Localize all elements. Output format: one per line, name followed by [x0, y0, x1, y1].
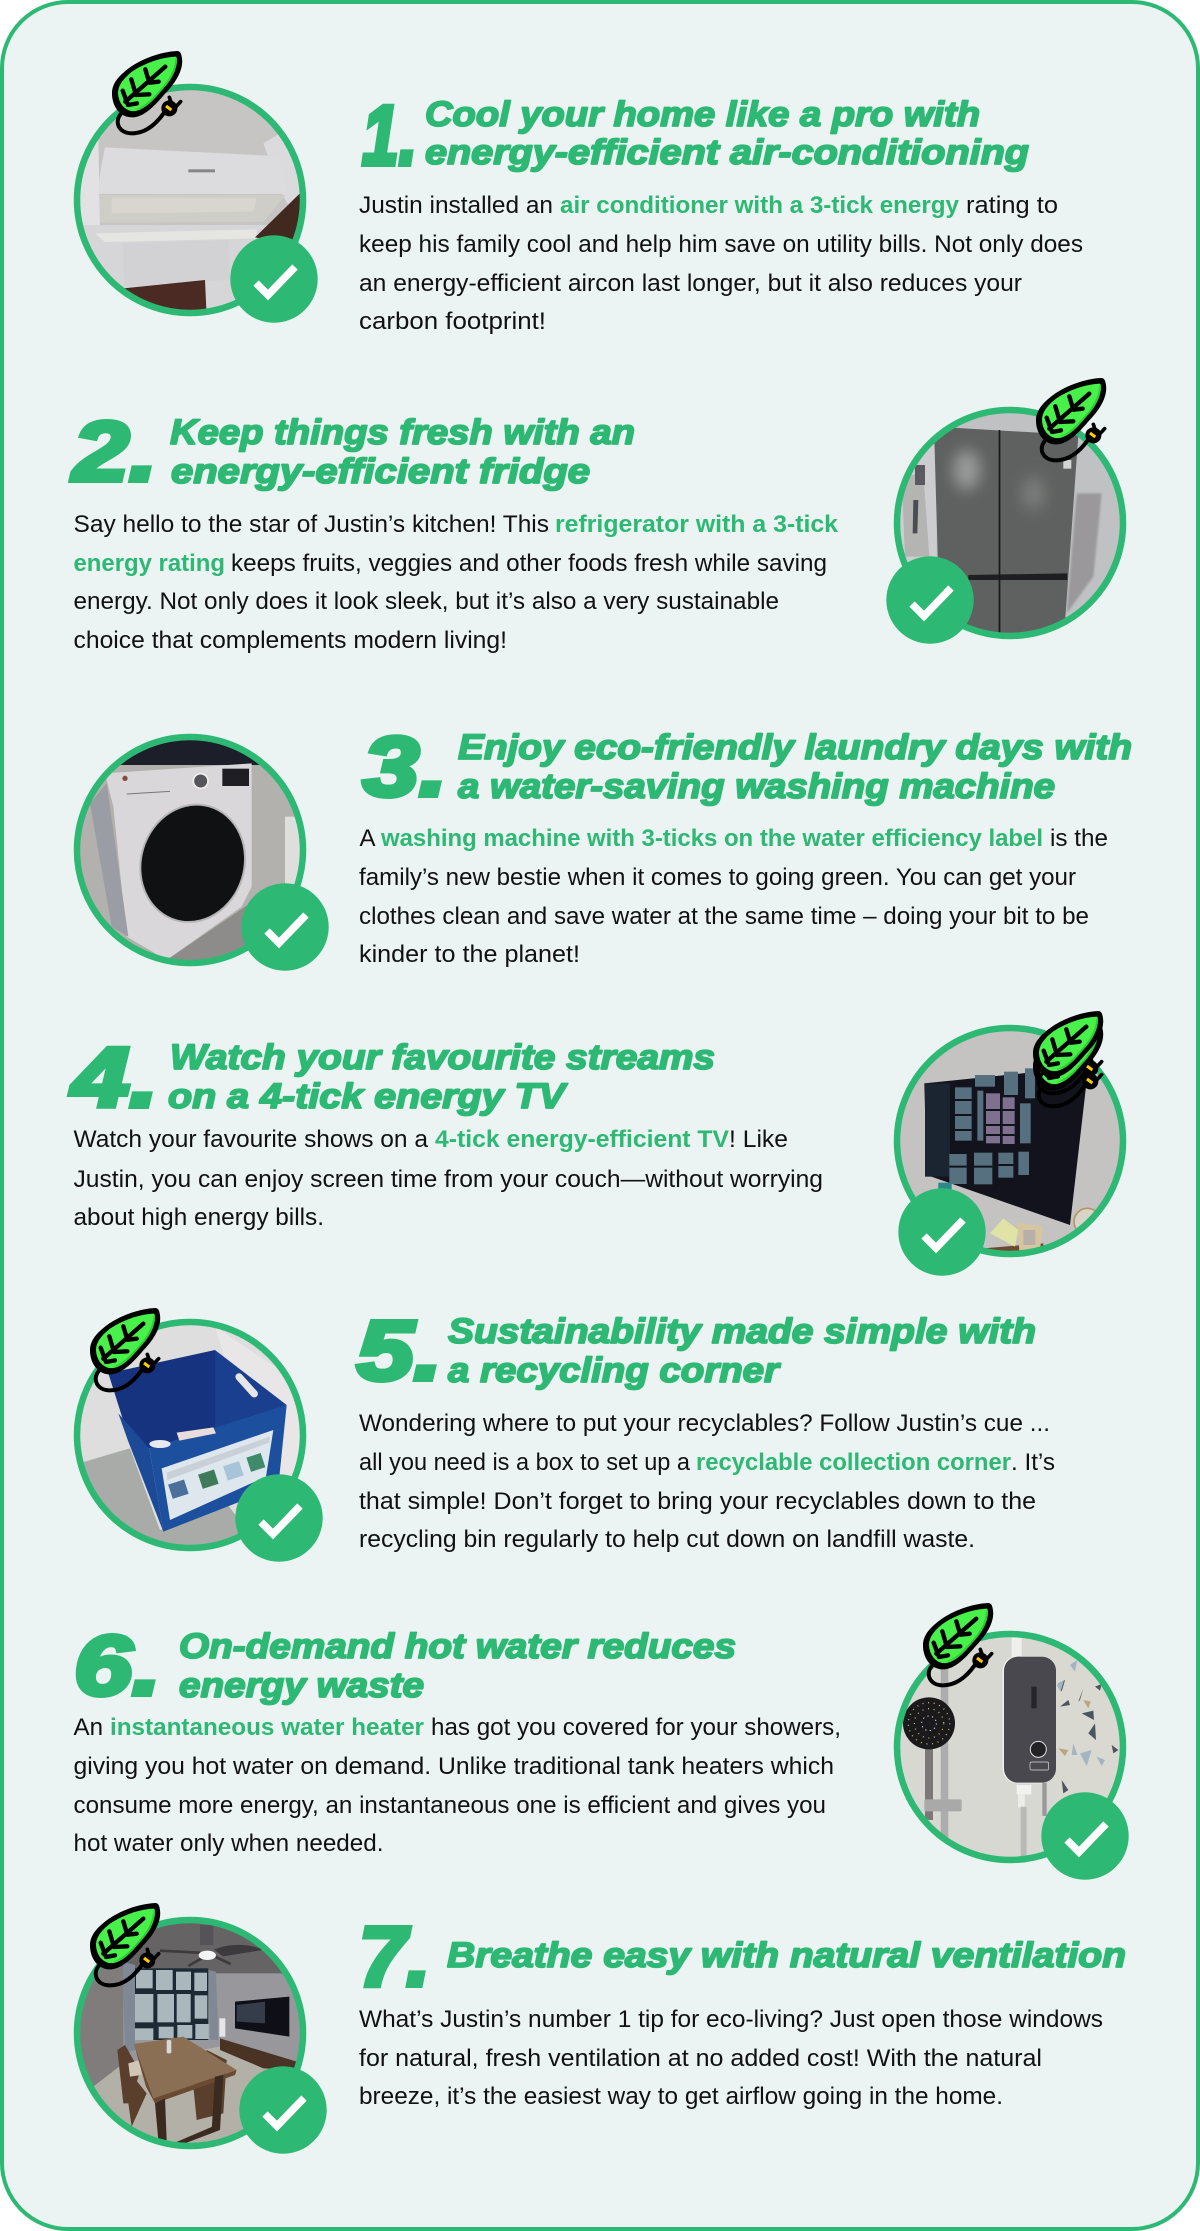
body text: energy. Not only does it look sleek, but it’s also a very sustainable [74, 588, 779, 615]
heading: ventilation: Breathe easy with natural ventilation [447, 1936, 1126, 1975]
body text: an energy-efficient aircon last longer, but it also reduces your [359, 270, 1022, 297]
section 4: TV [70, 1011, 1130, 1276]
icon: leaf with plug [90, 1903, 160, 1985]
body text [74, 1126, 823, 1231]
body text: breeze, it’s the easiest way to get airflow going in the home. [359, 2083, 1003, 2110]
icon: leaf with plug [923, 1603, 993, 1685]
body text: carbon footprint! [359, 308, 546, 335]
body text: washing machine with 3-ticks on the water efficiency label [380, 825, 1043, 852]
body text [359, 825, 1108, 968]
body text: . It’s [1011, 1449, 1055, 1476]
heading: TV [168, 1038, 715, 1116]
heading: fridge: Keep things fresh with an [170, 413, 635, 452]
photo: television [890, 1023, 1130, 1263]
body text: kinder to the planet! [359, 941, 580, 968]
heading number 5: 5. [357, 1304, 442, 1398]
body text: recycling bin regularly to help cut down on landfill waste. [359, 1526, 975, 1553]
body text [74, 1714, 841, 1857]
body text: Justin, you can enjoy screen time from your couch—without worrying [74, 1166, 823, 1193]
heading number 7: 7. [359, 1910, 430, 2004]
section 7: natural ventilation [70, 1903, 1126, 2157]
body text: recyclable collection corner [696, 1449, 1011, 1476]
photo: washing machine [70, 737, 310, 973]
heading: water heater [179, 1627, 736, 1705]
icon: check badge [230, 235, 318, 323]
heading: washing machine: a water-saving washing machine [458, 767, 1055, 806]
section 3: washing machine [70, 720, 1132, 973]
body text [359, 2006, 1103, 2110]
body text: hot water only when needed. [74, 1830, 384, 1857]
body text: air conditioner with a 3-tick energy [560, 192, 959, 219]
icon: overlapping leaf with plug [1033, 1011, 1103, 1106]
heading number 2: 2. [71, 404, 157, 498]
photo: living room [70, 1917, 310, 2157]
icon: check badge [898, 1188, 986, 1276]
body text: An [74, 1714, 103, 1741]
heading number 6: 6. [74, 1618, 161, 1712]
body text: What’s Justin’s number 1 tip for eco-living? Just open those windows [359, 2006, 1103, 2033]
heading: fridge: energy-efficient fridge [171, 452, 590, 491]
body text: A [360, 825, 376, 852]
heading number 1: 1. [362, 88, 417, 182]
body text: Watch your favourite shows on a [74, 1126, 428, 1153]
heading number 4: 4. [70, 1030, 158, 1124]
heading: washing machine [458, 728, 1132, 806]
icon: leaf with plug [112, 51, 182, 133]
body text: instantaneous water heater [110, 1714, 424, 1741]
photo: refrigerator [890, 403, 1130, 643]
heading: TV: Watch your favourite streams [170, 1038, 715, 1077]
body text: keeps fruits, veggies and other foods fresh while saving [231, 550, 827, 577]
body text: ! Like [729, 1126, 788, 1153]
body text: for natural, fresh ventilation at no added cost! With the natural [359, 2045, 1042, 2072]
body text: Wondering where to put your recyclables? Follow Justin’s cue ... [359, 1410, 1050, 1437]
heading: fridge [170, 413, 635, 491]
body text: all you need is a box to set up a [359, 1449, 690, 1476]
section 5: recycling corner [70, 1304, 1055, 1562]
body text: that simple! Don’t forget to bring your recyclables down to the [359, 1488, 1036, 1515]
body text: about high energy bills. [74, 1204, 324, 1231]
body text: consume more energy, an instantaneous one is efficient and gives you [74, 1792, 826, 1819]
section 6: water heater [74, 1603, 1130, 1880]
body text: has got you covered for your showers, [431, 1714, 841, 1741]
icon: check badge [239, 2066, 327, 2154]
body text: family’s new bestie when it comes to going green. You can get your [359, 864, 1076, 891]
body text: energy rating [74, 550, 225, 577]
body text: is the [1050, 825, 1108, 852]
heading: air-conditioning: energy-efficient air-conditioning [425, 133, 1029, 172]
body text: refrigerator with a 3-tick [555, 511, 838, 538]
body text: giving you hot water on demand. Unlike traditional tank heaters which [74, 1753, 834, 1780]
icon: check badge [235, 1474, 323, 1562]
heading: recycling: Sustainability made simple with [448, 1312, 1036, 1351]
body text: Justin installed an [359, 192, 553, 219]
body text: clothes clean and save water at the same time – doing your bit to be [359, 903, 1089, 930]
heading: water heater: On-demand hot water reduces [179, 1627, 736, 1666]
body text: rating to [966, 192, 1058, 219]
body text [74, 511, 838, 654]
heading: water heater: energy waste [179, 1666, 424, 1705]
body text [359, 1410, 1055, 1553]
icon: check badge [1041, 1792, 1129, 1880]
icon: check badge [241, 883, 329, 971]
heading: TV: on a 4-tick energy TV [168, 1077, 568, 1116]
icon: leaf with plug [90, 1308, 160, 1390]
body text: 4-tick energy-efficient TV [435, 1126, 730, 1153]
icon: leaf with plug [1036, 378, 1106, 460]
body text: choice that complements modern living! [74, 627, 507, 654]
section 1: air-conditioning [70, 51, 1083, 335]
icon: check badge [886, 556, 974, 644]
heading: air-conditioning [425, 95, 1029, 172]
heading: recycling: a recycling corner [448, 1351, 782, 1390]
heading: recycling [448, 1312, 1036, 1390]
photo: air conditioner [70, 83, 310, 318]
body text: keep his family cool and help him save on utility bills. Not only does [359, 231, 1083, 258]
body text [359, 192, 1083, 335]
heading: washing machine: Enjoy eco-friendly laundry days with [458, 728, 1132, 767]
section 2: fridge [71, 378, 1130, 654]
body text: Say hello to the star of Justin’s kitchen! This [74, 511, 549, 538]
heading number 3: 3. [363, 720, 447, 814]
heading: air-conditioning: Cool your home like a pro with [425, 95, 980, 134]
photo: recycling box [70, 1317, 310, 1557]
photo: instantaneous water heater [890, 1630, 1130, 1870]
